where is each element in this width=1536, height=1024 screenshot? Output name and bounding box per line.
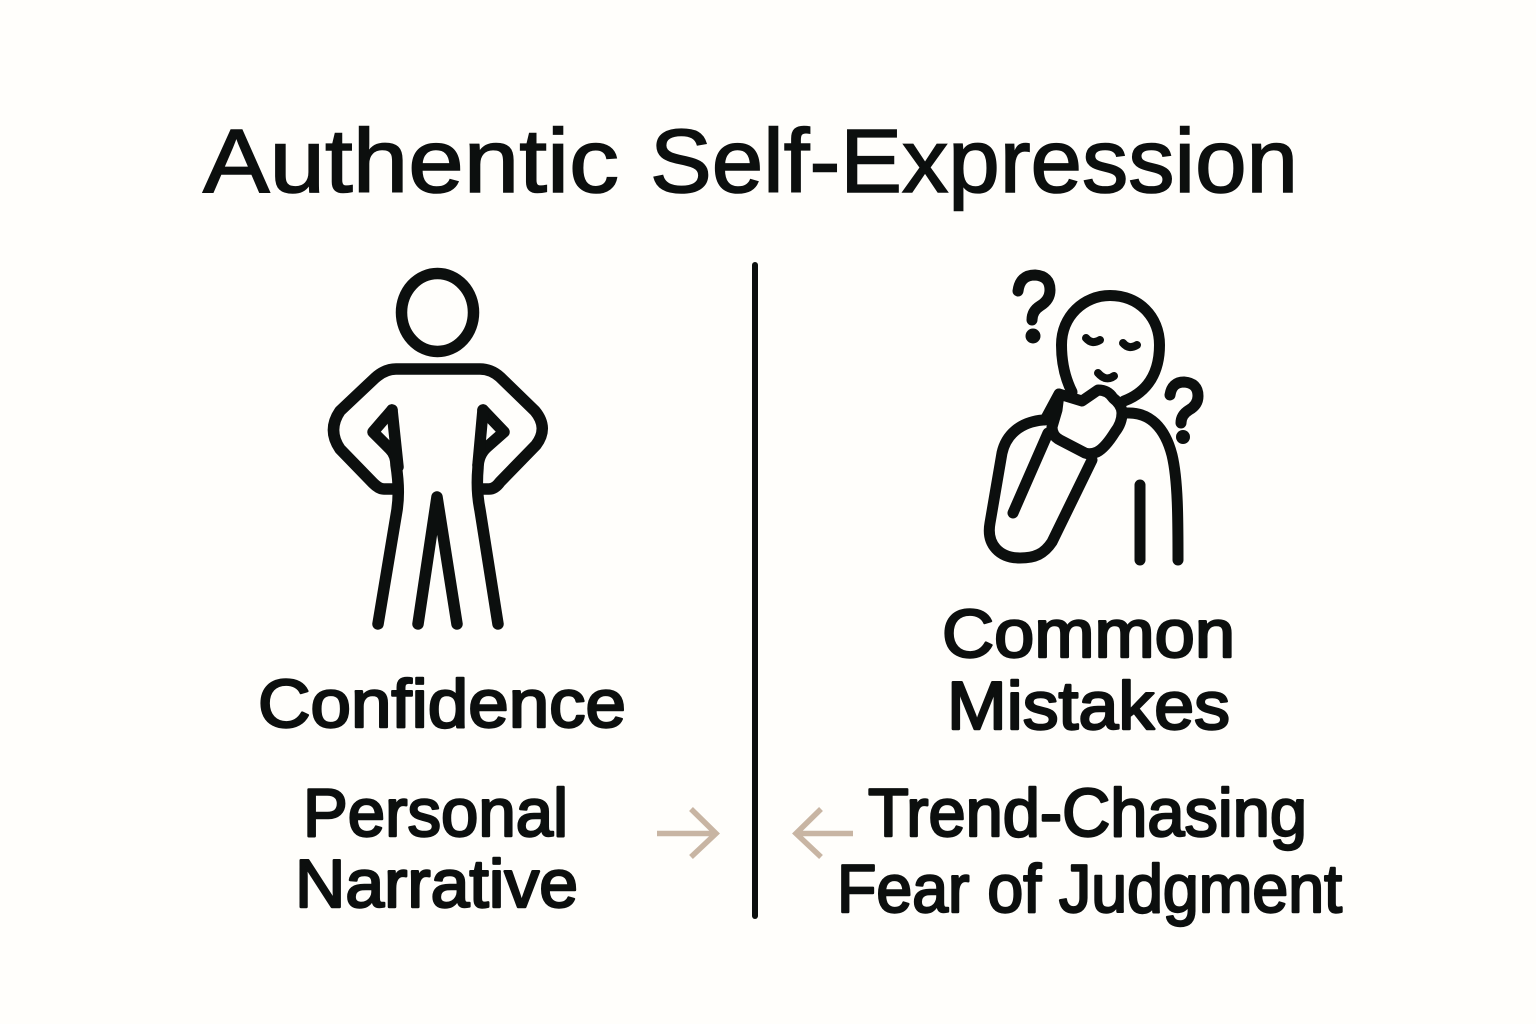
label: trend-chasing, fear of judgment [837, 775, 1342, 927]
icon: left question mark [1018, 275, 1050, 344]
arrow: left-pointing [796, 809, 853, 857]
label: trend-chasing, fear of judgment: Trend-Chasing [868, 775, 1307, 851]
icon: thinking person with question marks [989, 275, 1198, 560]
label: common mistakes [942, 596, 1235, 744]
label: common mistakes: Mistakes [947, 668, 1230, 744]
label: trend-chasing, fear of judgment: Fear of Judgment [837, 851, 1342, 927]
title [203, 112, 1298, 212]
label: personal narrative: Personal [303, 775, 568, 851]
title: Authentic [203, 112, 619, 212]
title: Self-Expression [650, 112, 1298, 212]
label: confidence: Confidence [258, 666, 626, 742]
icon: right question mark [1170, 382, 1198, 444]
label: common mistakes: Common [942, 596, 1235, 672]
label: personal narrative [295, 775, 578, 922]
arrow: right-pointing [657, 809, 716, 857]
divider [752, 262, 758, 919]
icon: confident person with hands on hips [334, 274, 542, 624]
label: personal narrative: Narrative [295, 846, 578, 922]
